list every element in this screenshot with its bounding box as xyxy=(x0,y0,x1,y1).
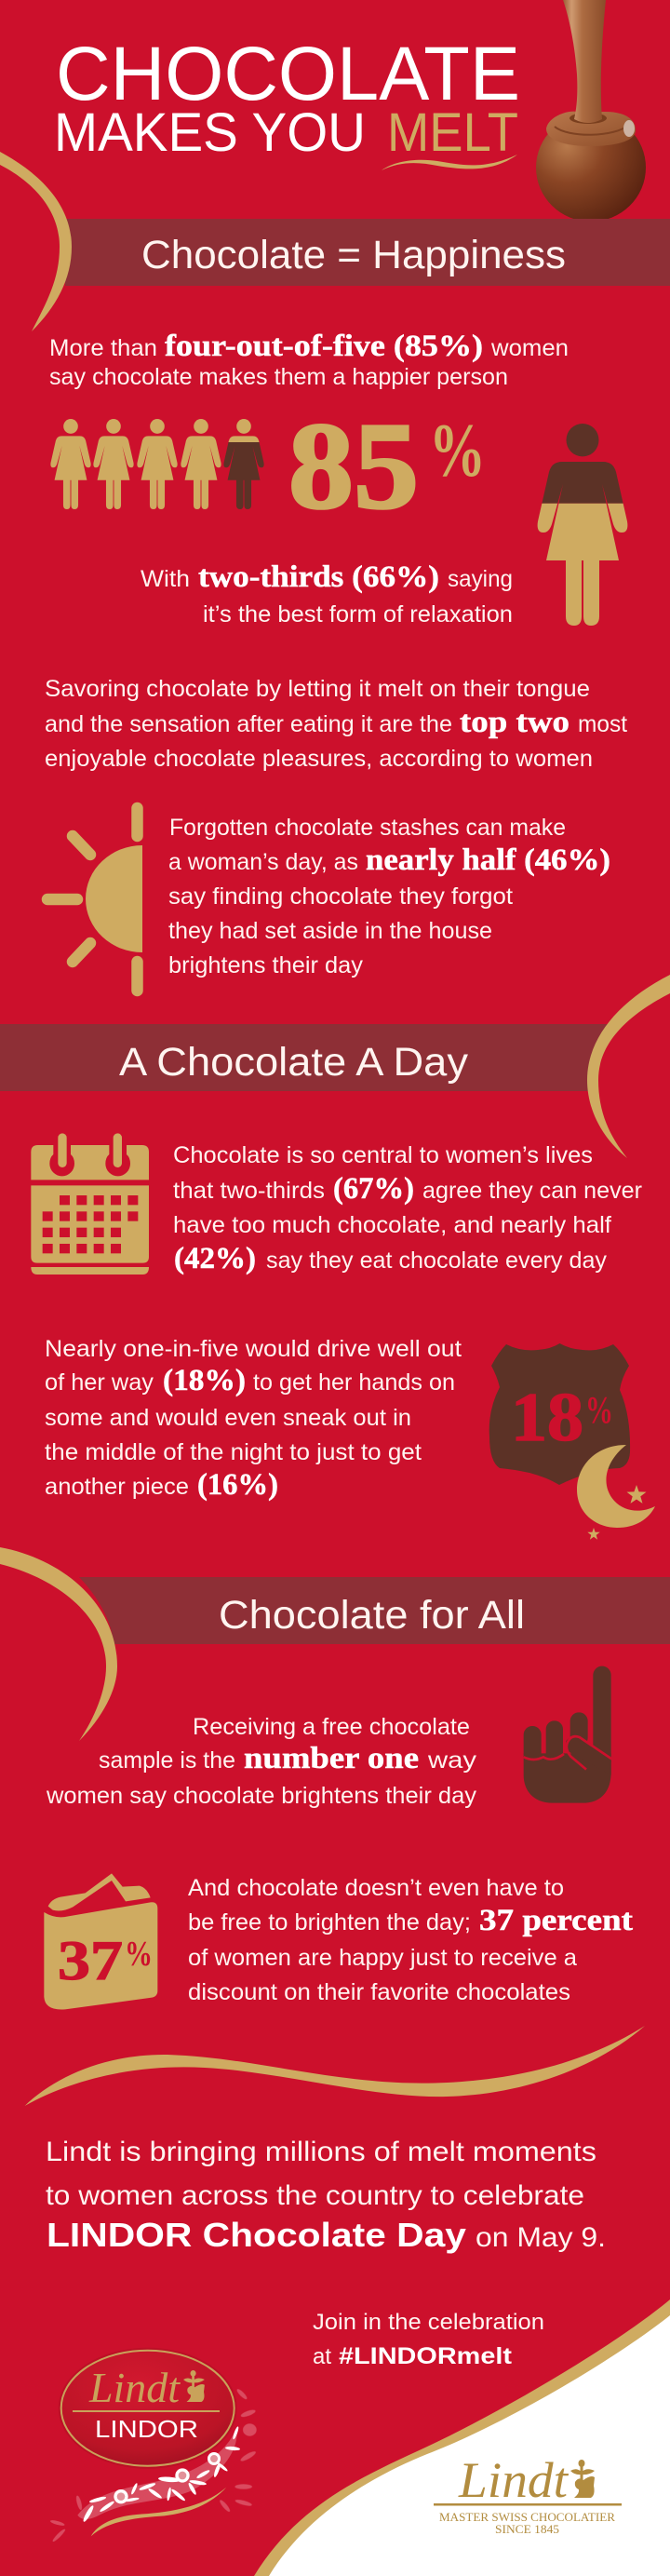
text: number one way xyxy=(46,1714,477,1809)
icon: road shield 18% with moon: % xyxy=(585,1388,613,1431)
text: four-out-of-five xyxy=(49,330,569,390)
icon: calendar xyxy=(31,1133,149,1275)
icon: melting chocolate ball xyxy=(536,0,646,222)
text: top two pleasures: most xyxy=(578,711,627,737)
text: central to women's lives: that two-thirds xyxy=(173,1178,325,1204)
section band: Chocolate for All xyxy=(79,1577,670,1644)
logo: Lindt master swiss chocolatier: MASTER SWISS CHOCOLATIER xyxy=(439,2510,615,2524)
section band: Chocolate for All: Chocolate for All xyxy=(219,1593,525,1638)
text: forgotten stashes: nearly half (46%) xyxy=(366,843,610,877)
text: one-in-five drive xyxy=(45,1336,462,1502)
text: LINDOR Chocolate Day: on May 9. xyxy=(476,2222,606,2253)
text: discount xyxy=(188,1875,633,2005)
text: LINDOR Chocolate Day: LINDOR Chocolate Day xyxy=(47,2216,466,2254)
text: two-thirds: it’s the best form of relaxation xyxy=(203,601,513,627)
icon: road shield 18% with moon: 18 xyxy=(511,1380,583,1456)
text: top two pleasures: and the sensation after eating it are the xyxy=(45,711,452,737)
icon: wallet 37%: % xyxy=(125,1935,153,1974)
text: four-out-of-five: women xyxy=(490,335,569,361)
stat: 85% xyxy=(288,397,486,534)
text: number one way: women say chocolate brightens their day xyxy=(46,1783,477,1809)
text: one-in-five drive: (18%) xyxy=(163,1364,246,1397)
title xyxy=(54,32,520,170)
text: join the celebration: #LINDORmelt xyxy=(339,2343,513,2369)
gold arc left lower xyxy=(0,1547,117,1741)
text: two-thirds: two-thirds (66%) xyxy=(198,560,439,594)
section band: Chocolate = Happiness xyxy=(65,219,670,286)
text: discount: be free to brighten the day; xyxy=(188,1909,471,1935)
text: one-in-five drive: some and would even sneak out in xyxy=(45,1405,411,1431)
text: one-in-five drive: Nearly one-in-five would drive well out xyxy=(45,1336,462,1362)
text: top two pleasures: Savoring chocolate by letting it melt on their tongue xyxy=(45,676,590,702)
text: discount: discount on their favorite chocolates xyxy=(188,1979,570,2005)
text: two-thirds xyxy=(141,560,513,627)
text: central to women's lives: say they eat chocolate every day xyxy=(266,1248,607,1274)
stat: 85%: % xyxy=(429,408,486,492)
title: CHOCOLATE xyxy=(56,32,520,116)
text: top two pleasures: enjoyable chocolate pleasures, according to women xyxy=(45,746,593,772)
text: four-out-of-five: say chocolate makes them a happier person xyxy=(49,364,508,390)
gold wave divider xyxy=(25,2026,645,2106)
text: forgotten stashes: a woman’s day, as xyxy=(168,849,358,875)
text: four-out-of-five: More than xyxy=(49,335,157,361)
text: four-out-of-five: four-out-of-five (85%) xyxy=(165,330,483,363)
text: central to women's lives xyxy=(173,1142,642,1275)
logo: Lindt LINDOR oval: LINDOR xyxy=(95,2415,198,2443)
text: forgotten stashes: they had set aside in the house xyxy=(168,918,492,944)
text: two-thirds: saying xyxy=(448,566,513,592)
floral ribbon xyxy=(49,2388,257,2542)
text: one-in-five drive: of her way xyxy=(45,1369,154,1396)
icon: wallet 37%: 37 xyxy=(58,1930,123,1991)
stat: 85%: 85 xyxy=(288,397,419,534)
text: join the celebration xyxy=(313,2310,544,2369)
text: discount: 37 percent xyxy=(479,1904,633,1937)
section band: Chocolate = Happiness: Chocolate = Happiness xyxy=(141,233,566,277)
text: forgotten stashes xyxy=(168,815,610,978)
text: central to women's lives: Chocolate is so central to women’s lives xyxy=(173,1142,593,1168)
icon: road shield 18% with moon xyxy=(489,1343,655,1540)
icon: large woman two-thirds filled xyxy=(538,424,627,626)
text: forgotten stashes: say finding chocolate they forgot xyxy=(168,883,513,910)
text: LINDOR Chocolate Day: to women across the country to celebrate xyxy=(46,2180,584,2211)
text: one-in-five drive: the middle of the night to just to get xyxy=(45,1439,422,1465)
white corner with gold swoosh xyxy=(254,2300,670,2576)
text: discount: And chocolate doesn’t even have to xyxy=(188,1875,564,1901)
text: one-in-five drive: another piece xyxy=(45,1474,189,1500)
text: number one way: sample is the xyxy=(99,1747,235,1774)
text: LINDOR Chocolate Day: Lindt is bringing millions of melt moments xyxy=(46,2137,596,2167)
text: central to women's lives: (42%) xyxy=(174,1242,256,1275)
text: forgotten stashes: Forgotten chocolate stashes can make xyxy=(169,815,566,841)
icon: number one hand xyxy=(524,1666,611,1803)
text: central to women's lives: have too much chocolate, and nearly half xyxy=(173,1212,611,1238)
icon: half sun xyxy=(47,808,142,991)
gold arc left xyxy=(0,152,72,331)
text: number one way: way xyxy=(427,1747,477,1774)
icon: five women pictogram xyxy=(50,419,264,509)
title: MELT xyxy=(387,102,518,163)
text: number one way: number one xyxy=(244,1742,419,1775)
gold arc right xyxy=(587,975,670,1158)
logo: Lindt master swiss chocolatier: SINCE 1845 xyxy=(495,2522,559,2536)
text: join the celebration: Join in the celebration xyxy=(313,2310,544,2335)
logo: Lindt LINDOR oval: Lindt xyxy=(88,2364,181,2411)
title: MAKES YOU xyxy=(54,102,366,163)
text: central to women's lives: (67%) xyxy=(333,1172,414,1206)
logo: Lindt master swiss chocolatier xyxy=(434,2452,622,2536)
section band: A Chocolate A Day xyxy=(0,1024,610,1091)
text: top two pleasures xyxy=(45,676,627,772)
text: two-thirds: With xyxy=(141,566,190,592)
text: LINDOR Chocolate Day xyxy=(46,2137,606,2254)
text: join the celebration: at xyxy=(313,2344,331,2369)
text: number one way: Receiving a free chocolate xyxy=(193,1714,470,1740)
text: one-in-five drive: to get her hands on xyxy=(253,1369,455,1396)
logo: Lindt master swiss chocolatier: Lindt xyxy=(458,2452,570,2508)
text: discount: of women are happy just to receive a xyxy=(188,1945,577,1971)
logo: Lindt LINDOR oval xyxy=(59,2348,237,2469)
text: forgotten stashes: brightens their day xyxy=(168,952,363,978)
text: top two pleasures: top two xyxy=(460,706,570,739)
icon: wallet 37% xyxy=(44,1873,157,2009)
text: one-in-five drive: (16%) xyxy=(197,1468,278,1502)
text: central to women's lives: agree they can never xyxy=(422,1178,642,1204)
section band: A Chocolate A Day: A Chocolate A Day xyxy=(119,1040,469,1085)
